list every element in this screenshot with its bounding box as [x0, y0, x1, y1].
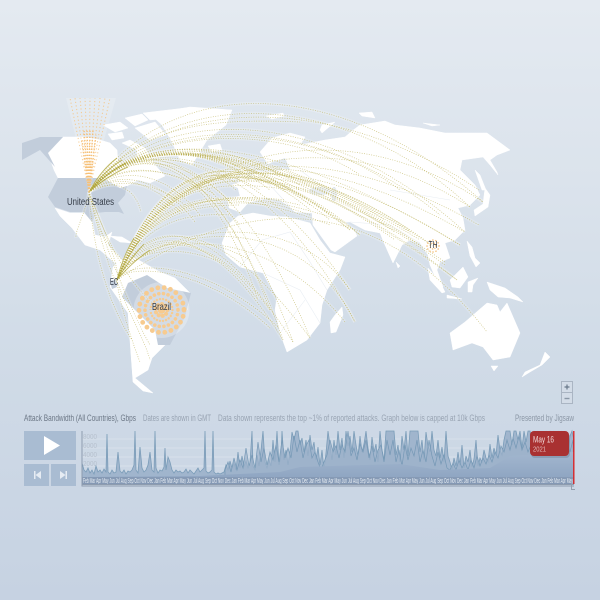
- country: Alaska: [22, 137, 63, 167]
- land: Madagascar: [330, 307, 343, 333]
- country: Ecuador: [110, 279, 117, 289]
- spikes: second series: [225, 431, 574, 484]
- y axis labels: [83, 432, 97, 468]
- land: Iceland: [208, 144, 222, 152]
- next button: [51, 464, 76, 486]
- arc halos: [76, 104, 487, 362]
- land: South America: [110, 258, 190, 393]
- Thailand attack marker: [426, 239, 440, 253]
- zoom control: [562, 382, 572, 404]
- label: United States: United States: [67, 196, 114, 208]
- land: New Zealand: [522, 352, 550, 377]
- x axis line: [82, 431, 574, 486]
- grid lines: [82, 439, 574, 466]
- land: Cuba: [110, 236, 132, 243]
- y axis labels: 8000: [83, 432, 97, 441]
- date tooltip: 2021: [533, 444, 546, 454]
- zoom out button: [562, 392, 572, 404]
- spikes: first series: [82, 431, 574, 484]
- land: Arctic islands of Eurasia: [266, 112, 440, 133]
- country: United States: [48, 178, 127, 222]
- land: Philippines: [467, 241, 480, 267]
- caption: dates note: Dates are shown in GMT: [143, 413, 211, 424]
- land: Eurasia: [228, 121, 510, 288]
- current position line: [573, 431, 575, 484]
- highlighted countries in grey-blue: [22, 137, 191, 345]
- zoom in button: [562, 382, 572, 392]
- land: Sumatra and Java: [428, 268, 462, 299]
- caption: chart title: Attack Bandwidth (All Countries), Gbps: [24, 413, 136, 424]
- land: UK and Ireland: [231, 165, 248, 181]
- land: Canadian Arctic islands: [103, 108, 185, 140]
- country: Brazil: [122, 275, 191, 345]
- fan halo: [66, 98, 116, 192]
- y axis labels: 2000: [83, 459, 97, 468]
- landmass: white countries: [48, 107, 550, 393]
- attack arcs from Ecuador: [92, 150, 487, 362]
- land: Japan: [474, 188, 490, 216]
- faint borders: [240, 170, 450, 333]
- bandwidth chart: [82, 431, 575, 490]
- base area: [82, 452, 574, 484]
- marker dots: [139, 288, 184, 332]
- date tooltip: [530, 431, 570, 458]
- land: Africa: [222, 213, 345, 352]
- land: Canada: [48, 137, 165, 188]
- land: Sri Lanka: [396, 262, 400, 268]
- dense bundle near Ecuador: [117, 238, 150, 280]
- orange fan above United States: [66, 98, 116, 192]
- y axis labels: 4000: [83, 450, 97, 459]
- seas cut from land: [272, 158, 337, 201]
- world map: [22, 107, 550, 393]
- land: Sakhalin: [475, 170, 486, 190]
- land: Australia: [450, 303, 520, 360]
- land: Tasmania: [491, 366, 498, 371]
- dense bundle near United States: [89, 158, 128, 192]
- date tooltip: May 16: [533, 434, 554, 446]
- label: TH: TH: [428, 240, 438, 251]
- Brazil attack marker: [134, 282, 190, 338]
- marker halo: [134, 282, 190, 338]
- land: Sulawesi: [468, 278, 478, 292]
- fan dots: [70, 98, 110, 192]
- x axis band: [82, 477, 574, 484]
- play button: [24, 431, 76, 460]
- land: Borneo: [450, 267, 468, 288]
- y axis labels: 6000: [83, 441, 97, 450]
- land: Mexico and Central America: [55, 208, 123, 263]
- attack arcs from United States: [76, 104, 483, 345]
- caption: data note: Data shown represents the top ~1% of reported attacks. Graph below is capped at 10k Gbps: [218, 413, 485, 424]
- land: New Guinea: [487, 282, 523, 302]
- label: EC: EC: [110, 277, 118, 288]
- label: Brazil: Brazil: [152, 301, 171, 313]
- range handle: [572, 484, 575, 490]
- previous button: [24, 464, 49, 486]
- land: Greenland: [150, 107, 232, 165]
